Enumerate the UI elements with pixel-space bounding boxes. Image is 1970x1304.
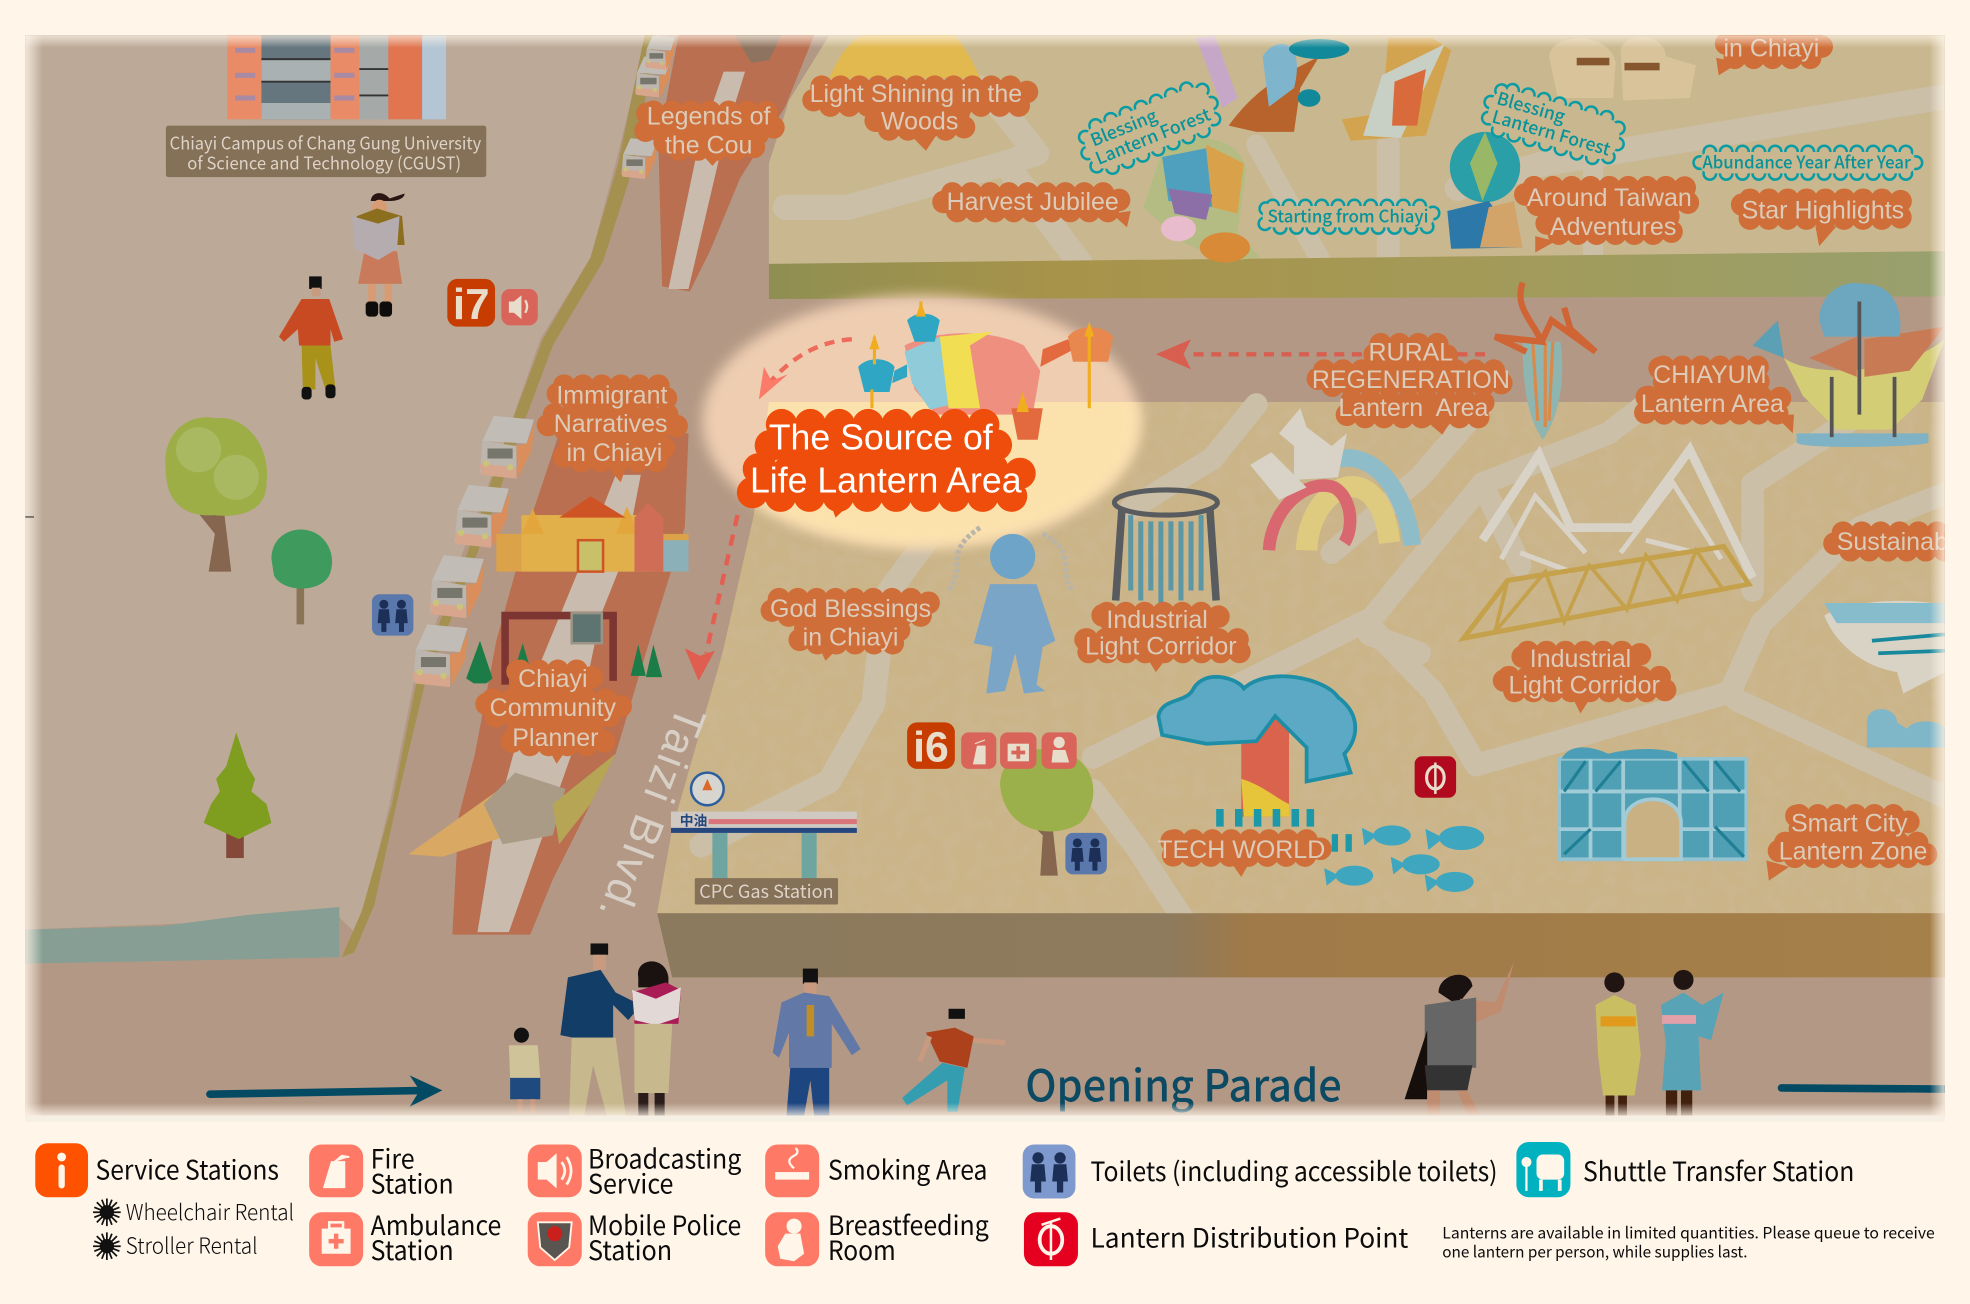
source of life lantern sculpture <box>858 302 1113 440</box>
tech tree sculpture <box>1158 676 1355 852</box>
mountain bamboo sculpture <box>1464 450 1753 638</box>
small tree <box>271 529 332 624</box>
Chiayum boat sculpture <box>1753 283 1945 447</box>
rainbow horse sculpture <box>1250 408 1412 550</box>
legend: stroller rental: Stroller Rental <box>126 1230 258 1261</box>
tree near i6 <box>1000 749 1093 876</box>
legend: ambulance station: Ambulance <box>371 1204 501 1243</box>
callout: legends of the Cou: Legends of <box>647 102 770 130</box>
callout: Chiayi community planner: Planner <box>512 724 598 752</box>
fire icon <box>961 732 996 769</box>
lower road median <box>452 433 689 935</box>
legend: mobile police <box>528 1204 741 1268</box>
callout: light shining: Woods <box>881 107 958 135</box>
teal callout: blessing lantern forest right: Lantern Forest <box>1489 104 1614 161</box>
upper sand area <box>769 35 1945 266</box>
callout: light shining <box>810 80 1028 151</box>
tree <box>165 417 267 572</box>
callout: rural regeneration <box>1312 339 1510 435</box>
lower sand area <box>657 402 1945 913</box>
callout: Chiayum: CHIAYUM <box>1653 361 1767 389</box>
callout: light shining: Light Shining in the <box>810 80 1022 108</box>
ambulance icon <box>1000 732 1037 769</box>
temple <box>496 496 689 572</box>
callout: in Chiayi: in Chiayi <box>1724 35 1819 63</box>
gas station: 中油 <box>680 812 707 828</box>
callout: industrial light corridor two: Industrial <box>1530 645 1631 673</box>
callout: harvest jubilee: Harvest Jubilee <box>947 188 1119 216</box>
teal callout: blessing lantern forest left <box>1079 82 1220 174</box>
legend: lantern note: one lantern per person, while supplies last. <box>1442 1240 1748 1263</box>
legend: shuttle transfer station: Shuttle Transfer Station <box>1583 1150 1854 1189</box>
map bottom glow <box>25 1116 1945 1122</box>
legend: toilets: Toilets (including accessible toilets) <box>1091 1150 1498 1189</box>
forest sculpture teal tree <box>1196 35 1349 132</box>
legend: service stations <box>35 1143 279 1197</box>
callout: rural regeneration: RURAL <box>1369 339 1453 367</box>
shuttle buses <box>413 35 676 687</box>
callout: around Taiwan: Adventures <box>1550 213 1676 241</box>
callout: god blessings: in Chiayi <box>803 624 898 652</box>
woman in yellow kimono <box>1596 972 1641 1116</box>
legend: fire station: Fire <box>371 1137 415 1176</box>
callout: tech world <box>1157 836 1325 877</box>
upper sand paths <box>785 88 1960 264</box>
parade direction arrow right <box>1781 1088 1960 1089</box>
green gold grass band <box>769 251 1945 299</box>
brown top lantern <box>735 35 781 63</box>
teal water <box>25 907 339 964</box>
legend: ambulance station <box>309 1204 501 1268</box>
coral stick sculpture <box>1495 283 1596 440</box>
station i7 icon: i7 <box>453 280 490 329</box>
legend: mobile police: Mobile Police <box>588 1204 741 1243</box>
upper road median <box>658 35 814 291</box>
callout: Chiayi community planner: Chiayi <box>518 665 588 693</box>
person in red sweater <box>279 276 343 399</box>
callout: Chiayum <box>1641 361 1794 433</box>
callout: sustainable (cut off): Sustainab <box>1837 528 1948 556</box>
main callout: source of life lantern area: The Source of <box>769 418 993 458</box>
callout: immigrant narratives: Immigrant <box>556 381 667 409</box>
callout: industrial light corridor one <box>1082 606 1244 672</box>
teal callout: starting from Chiayi: Starting from Chiayi <box>1268 203 1428 228</box>
callout: industrial light corridor one: Industrial <box>1106 606 1208 634</box>
red arrow: from rural regeneration <box>1156 339 1485 369</box>
forest sculpture colourful lantern <box>1143 138 1260 263</box>
left land area <box>25 35 647 936</box>
legend <box>35 1137 1935 1268</box>
teal callout: blessing lantern forest left: Lantern Forest <box>1092 102 1214 171</box>
woven bamboo installation <box>408 754 616 857</box>
legend: broadcasting service <box>528 1137 741 1201</box>
callout: immigrant narratives: Narratives <box>554 410 668 438</box>
callout: around Taiwan <box>1525 184 1692 253</box>
callout: immigrant narratives: in Chiayi <box>566 439 662 467</box>
family walking <box>509 943 681 1116</box>
street name: Taizi Blvd. <box>589 700 715 926</box>
legend: lantern note: Lanterns are available in limited quantities. Please queue to receive <box>1442 1221 1935 1244</box>
campus label <box>166 126 486 177</box>
toilet icon west <box>372 594 413 636</box>
wind chime sculpture <box>1114 490 1217 606</box>
person reading map <box>352 193 405 317</box>
pine tree <box>204 732 271 858</box>
callout: legends of the Cou <box>643 102 774 166</box>
legend: mobile police: Station <box>588 1229 672 1268</box>
legend: breastfeeding room <box>765 1204 989 1268</box>
broadcasting icon <box>501 289 538 325</box>
legend: ambulance station: Station <box>371 1229 454 1268</box>
small pines <box>466 641 662 683</box>
callout: in Chiayi <box>1716 35 1822 75</box>
sand paths <box>701 405 1960 923</box>
callout: tech world: TECH WORLD <box>1157 836 1325 864</box>
person pointing <box>1405 962 1514 1116</box>
blue dome sculpture <box>1867 709 1945 747</box>
callout: immigrant narratives <box>548 381 677 482</box>
legend: lantern note <box>1442 1221 1935 1263</box>
man in blue sweater <box>773 969 861 1116</box>
callout: Chiayum: Lantern Area <box>1641 390 1784 418</box>
callout: around Taiwan: Around Taiwan <box>1527 184 1692 212</box>
legend: fire station: Station <box>371 1162 454 1201</box>
patchwork astronaut figure <box>949 528 1074 693</box>
callout: industrial light corridor one: Light Corridor <box>1085 633 1237 661</box>
legend: smoking area: Smoking Area <box>828 1149 988 1188</box>
legend: service stations: Service Stations <box>96 1149 279 1188</box>
teal callout: blessing lantern forest left: Blessing <box>1086 103 1161 152</box>
main callout: source of life lantern area <box>749 418 1023 518</box>
campus label: of Science and Technology (CGUST) <box>187 151 461 176</box>
olive river bank <box>342 35 656 957</box>
legend: lantern distribution point: Lantern Distribution Point <box>1091 1216 1408 1255</box>
forest sculpture ribbon <box>1342 38 1451 141</box>
legend: breastfeeding room: Room <box>828 1229 896 1268</box>
sand texture <box>657 402 1945 913</box>
highlight circle around focus area <box>702 295 1140 546</box>
legend: breastfeeding room: Breastfeeding <box>828 1204 989 1243</box>
fish school <box>1324 825 1484 892</box>
main callout: source of life lantern area: Life Lantern Area <box>750 460 1022 500</box>
teal callout: blessing lantern forest right <box>1484 84 1624 163</box>
callout: rural regeneration: REGENERATION <box>1312 366 1510 394</box>
woman in teal kimono <box>1661 970 1724 1116</box>
red arrow: toward source of life <box>759 339 852 399</box>
callout: smart city: Smart City <box>1791 810 1908 838</box>
opening parade label: Opening Parade <box>1025 1051 1342 1115</box>
dark earth band <box>657 913 1945 977</box>
gas station label: CPC Gas Station <box>699 878 834 904</box>
callout: smart city: Lantern Zone <box>1779 837 1927 865</box>
callout: industrial light corridor two: Light Corridor <box>1509 671 1660 699</box>
callout: legends of the Cou: the Cou <box>665 131 752 159</box>
station i6 icon: i6 <box>913 723 949 771</box>
callout: Chiayi community planner: Community <box>490 694 617 722</box>
teal callout: abundance: Abundance Year After Year <box>1702 149 1912 174</box>
callout: smart city <box>1766 810 1927 881</box>
teal window frame sculpture <box>1559 747 1746 859</box>
callout: star highlights <box>1741 197 1905 246</box>
legend: smoking area <box>765 1144 988 1197</box>
teal callout: blessing lantern forest right: Blessing <box>1494 86 1568 129</box>
legend: toilets <box>1023 1144 1498 1198</box>
breastfeeding icon <box>1042 732 1077 769</box>
community gate <box>505 613 613 685</box>
legend: broadcasting service: Service <box>588 1162 673 1201</box>
running child <box>902 1009 1005 1112</box>
callout: god blessings <box>770 595 931 661</box>
callout: Chiayi community planner <box>486 665 621 764</box>
callout: god blessings: God Blessings <box>770 595 931 623</box>
whale sculpture <box>1824 601 1945 693</box>
legend: broadcasting service: Broadcasting <box>588 1137 741 1176</box>
legend: fire station <box>309 1137 454 1201</box>
gas station <box>671 773 857 879</box>
legend: shuttle transfer station <box>1516 1142 1854 1197</box>
parade direction arrow left <box>210 1075 442 1107</box>
legend: wheelchair rental: Wheelchair Rental <box>126 1196 294 1227</box>
callout: star highlights: Star Highlights <box>1742 197 1904 225</box>
toilet icon east <box>1065 833 1107 874</box>
callout: harvest jubilee <box>944 188 1131 227</box>
legend: lantern distribution point <box>1024 1212 1408 1266</box>
lantern distribution icon on map <box>1415 756 1456 798</box>
callout: industrial light corridor two <box>1504 645 1667 714</box>
campus building <box>227 35 446 119</box>
campus label: Chiayi Campus of Chang Gung University <box>170 130 481 155</box>
forest sculpture globe <box>1447 132 1523 249</box>
gold dome lantern <box>829 35 980 78</box>
callout: rural regeneration: Lantern Area <box>1338 394 1488 422</box>
red arrow: down the boulevard <box>685 515 738 681</box>
forest sculpture animals <box>1549 37 1696 101</box>
